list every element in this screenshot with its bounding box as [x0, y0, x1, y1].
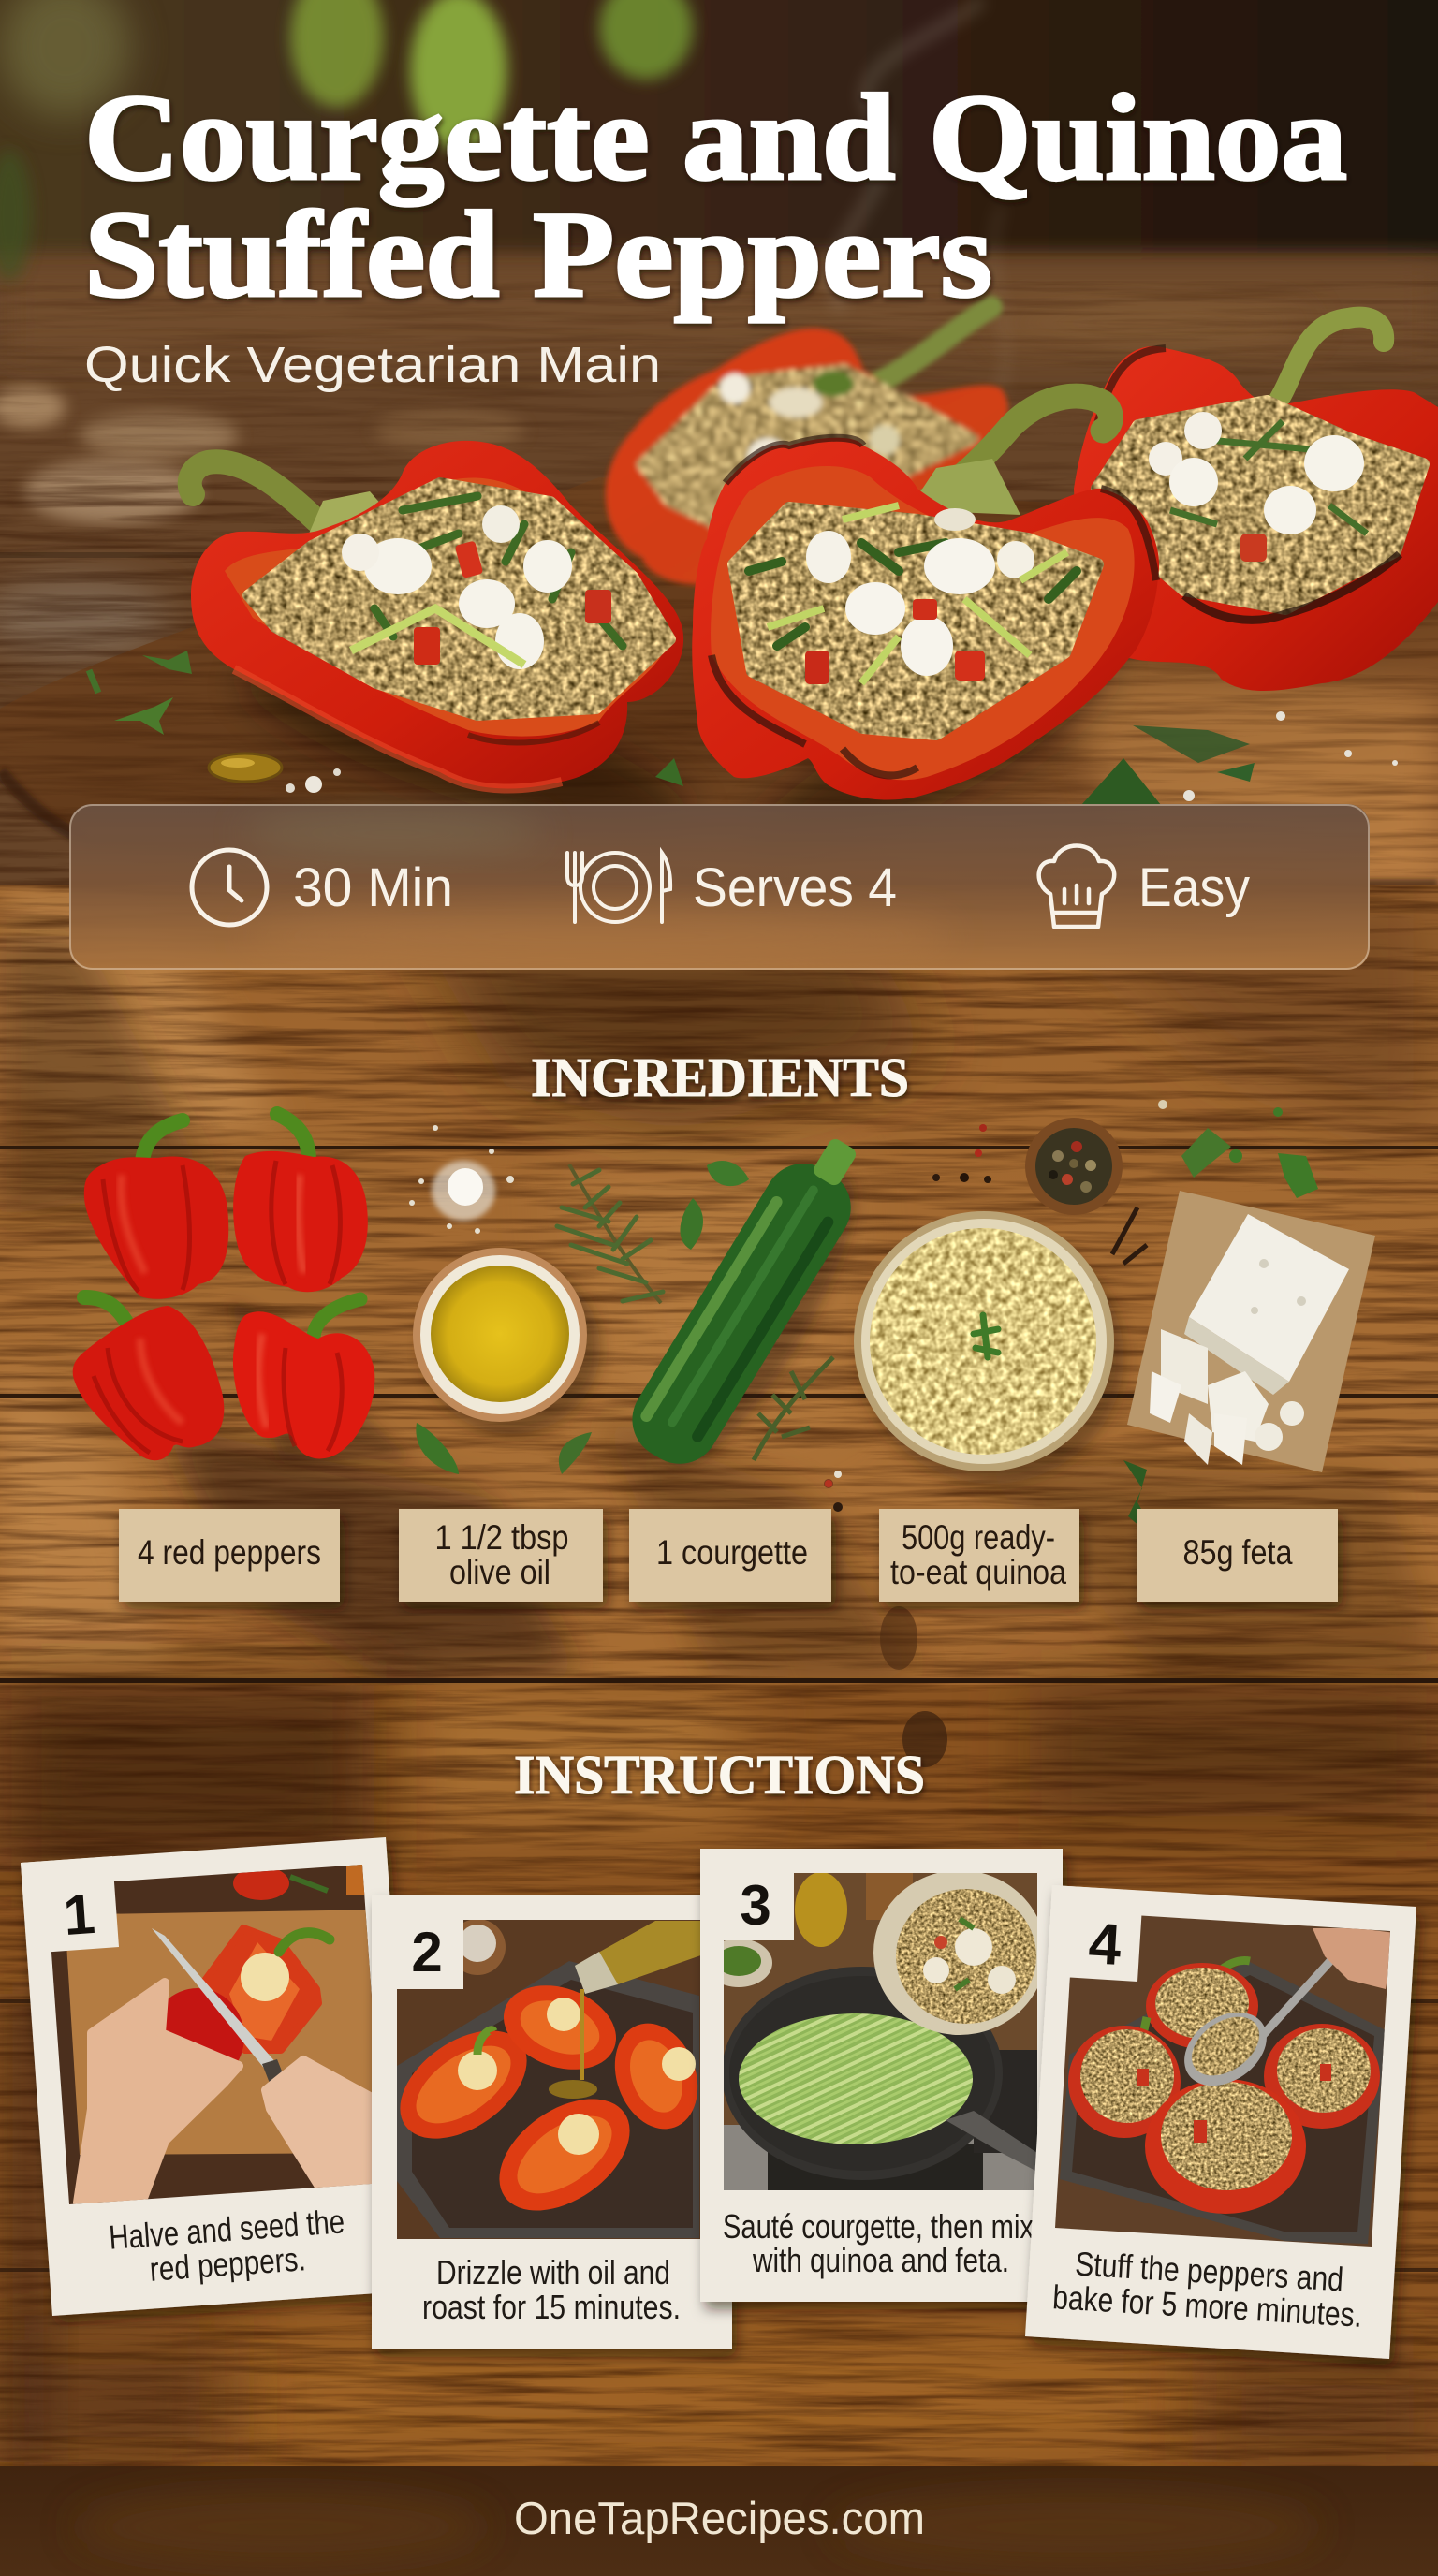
caption 2: Drizzle with oil and [436, 2253, 670, 2291]
step number 1 [21, 1856, 119, 1954]
back centre pepper [606, 307, 1008, 585]
back right pepper [1074, 317, 1438, 691]
caption 2 [422, 2253, 681, 2326]
label: peppers: 4 red peppers [138, 1533, 321, 1572]
pepper bottom left [73, 1297, 224, 1460]
label: peppers [119, 1509, 340, 1602]
caption 4: Stuff the peppers and [1074, 2245, 1344, 2298]
step number 2 [372, 1895, 463, 1989]
caption 1 [108, 2202, 345, 2289]
ingredient labels [119, 1509, 1338, 1602]
servings: Serves 4 [693, 857, 897, 918]
step card 1 [21, 1837, 418, 2316]
caption 4 [1051, 2245, 1363, 2334]
footer band [0, 2466, 1438, 2576]
label: olive oil [399, 1509, 603, 1602]
title: Stuffed Peppers [84, 185, 992, 323]
icon: clock [192, 850, 267, 925]
prep time: 30 Min [293, 857, 453, 918]
label: olive oil: olive oil [449, 1553, 550, 1591]
caption 1: red peppers. [148, 2239, 307, 2289]
label: quinoa: to-eat quinoa [890, 1553, 1066, 1591]
info bar [69, 804, 1370, 970]
ingredient: courgette [618, 1120, 886, 1488]
ingredient: salt pile [409, 1125, 514, 1234]
table and background [0, 0, 1438, 886]
hero photo: stuffed peppers on a wooden board [0, 0, 1438, 896]
caption 3: Sauté courgette, then mix [723, 2207, 1034, 2246]
label: quinoa: 500g ready- [902, 1518, 1055, 1557]
label: quinoa [879, 1509, 1079, 1602]
pepper top left [84, 1120, 228, 1299]
heading: ingredients: INGREDIENTS [531, 1046, 909, 1108]
front left pepper [190, 441, 683, 789]
caption 4: bake for 5 more minutes. [1051, 2277, 1363, 2334]
front centre pepper [692, 396, 1159, 799]
label: courgette: 1 courgette [656, 1533, 808, 1572]
title: Courgette and Quinoa [84, 68, 1347, 206]
label: courgette [629, 1509, 831, 1602]
ingredient: herb sprigs top right [1158, 1100, 1318, 1198]
wood table background [0, 886, 1438, 2467]
caption 2: roast for 15 minutes. [422, 2288, 681, 2326]
board garnish: herbs, oil drop and salt [89, 651, 1398, 805]
label: olive oil: 1 1/2 tbsp [434, 1518, 569, 1557]
icon: plate with fork and knife [567, 853, 670, 922]
ingredient: rosemary and basil leaves [557, 1161, 749, 1303]
step number 4: 4 [1087, 1911, 1123, 1978]
label: feta: 85g feta [1183, 1533, 1293, 1572]
step card 4 [1025, 1885, 1416, 2359]
ingredient: peppercorn bowl and scattered spices [932, 1118, 1147, 1264]
caption 3 [723, 2207, 1034, 2279]
title [84, 68, 1347, 323]
footer website: OneTapRecipes.com [514, 2494, 925, 2544]
heading: instructions: INSTRUCTIONS [514, 1744, 925, 1806]
cutting board [0, 477, 1438, 896]
ingredient: herbs near courgette and bowl [416, 1357, 843, 1512]
step number 3 [700, 1849, 794, 1940]
ingredient: four red peppers [73, 1114, 412, 1460]
photo: stuffing peppers on a tray [1049, 1900, 1395, 2251]
difficulty: Easy [1138, 857, 1250, 918]
caption 3: with quinoa and feta. [752, 2241, 1009, 2279]
herb near labels [1123, 1460, 1161, 1544]
ingredient: olive oil bowl [413, 1248, 600, 1434]
photo: drizzling oil on peppers [380, 1919, 712, 2239]
caption 1: Halve and seed the [108, 2202, 345, 2257]
ingredient: feta on parchment [1127, 1191, 1375, 1472]
pepper bottom right [233, 1299, 374, 1458]
icon: chef hat [1039, 846, 1114, 927]
photo: sauteing courgette [705, 1870, 1046, 2190]
ingredient: quinoa bowl [854, 1211, 1123, 1484]
step number 1: 1 [62, 1882, 97, 1947]
step card 2 [372, 1895, 732, 2349]
label: feta [1137, 1509, 1338, 1602]
subtitle: Quick Vegetarian Main [84, 337, 661, 393]
pepper top right [233, 1114, 368, 1292]
step number 2: 2 [411, 1921, 443, 1983]
step number 3: 3 [740, 1874, 771, 1937]
step card 3 [700, 1849, 1063, 2302]
photo: halving a pepper [37, 1858, 393, 2214]
step number 4 [1047, 1885, 1143, 1982]
